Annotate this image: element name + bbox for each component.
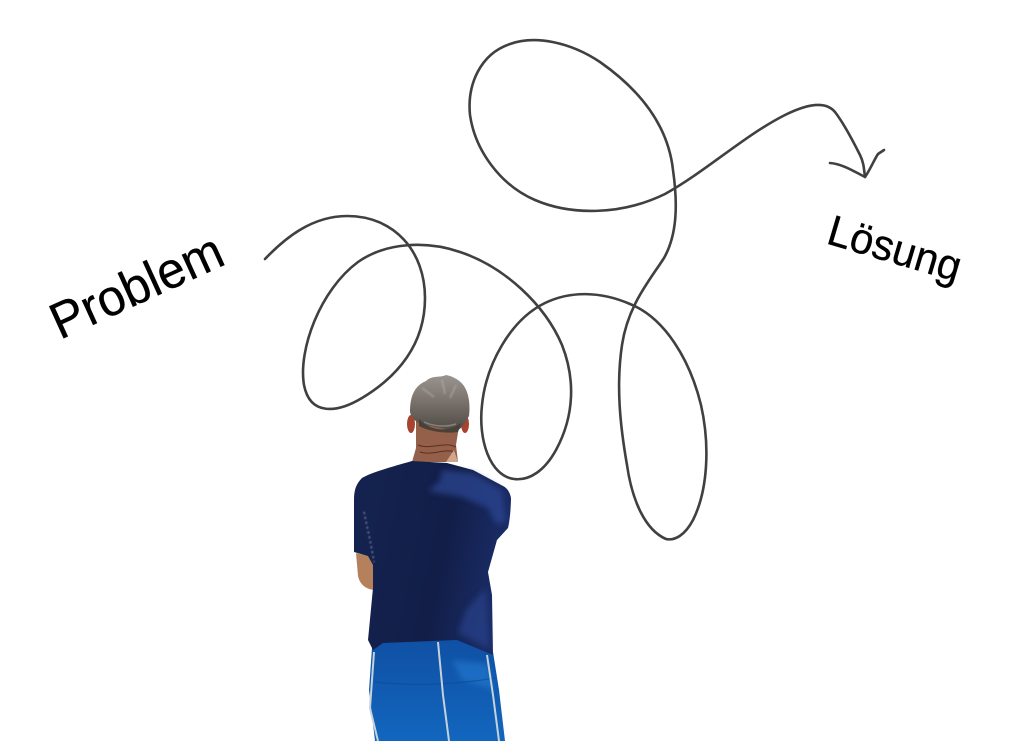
person seen from behind bbox=[354, 375, 511, 741]
forearm bbox=[356, 553, 374, 590]
shorts stripes bbox=[370, 642, 499, 741]
shirt highlights bbox=[428, 470, 506, 524]
ears and neck bbox=[407, 415, 469, 462]
label: Problem: Problem bbox=[41, 222, 232, 350]
shirt bbox=[354, 461, 511, 655]
label: Lösung: Lösung bbox=[822, 207, 967, 291]
cap bbox=[410, 375, 469, 433]
arrow: winding path from problem to solution bbox=[265, 40, 884, 539]
shorts bbox=[369, 638, 505, 741]
